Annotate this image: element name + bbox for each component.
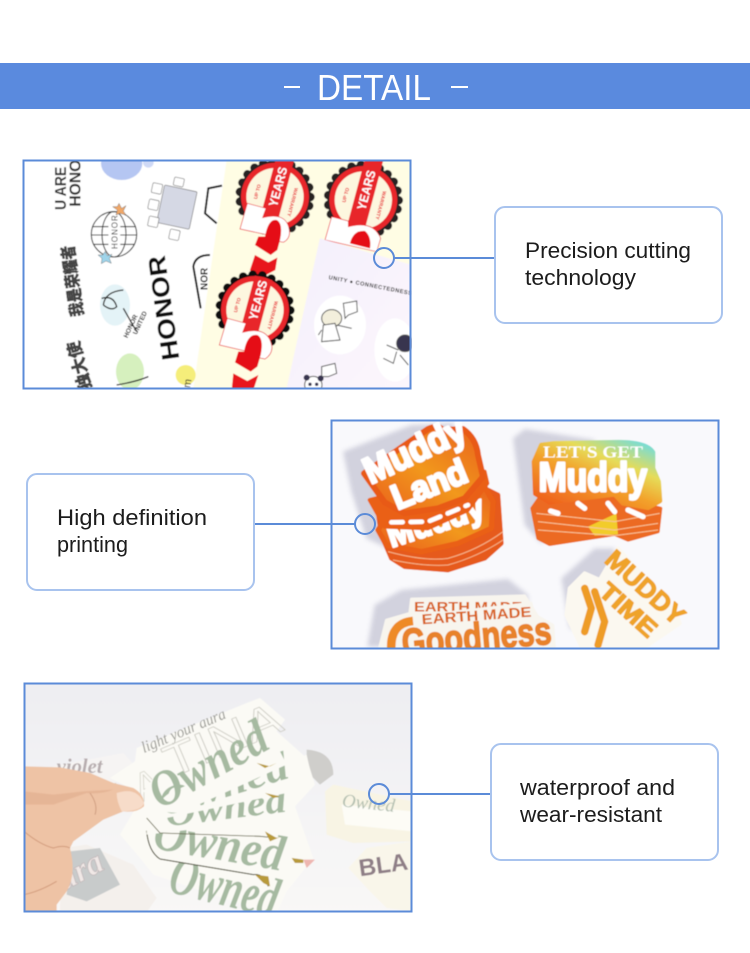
sticker: latina owned fan [115, 698, 315, 910]
sticker badge: YEARS [246, 279, 270, 322]
marker: panel 1 [374, 248, 394, 268]
callout connector: precision cutting [394, 257, 495, 259]
sticker badge: UP TO [253, 184, 263, 200]
callout: precision cutting [495, 207, 722, 323]
sticker badge: WARRANTY [265, 300, 279, 331]
sticker badge [323, 162, 404, 236]
blurred background stickers: ura [50, 843, 110, 898]
sticker: holographic muddy stack: Muddy [539, 454, 647, 500]
callout: high definition: High definition [57, 505, 207, 530]
sticker: muddy land stack: Land [386, 452, 473, 517]
sticker: muddy land stack: Muddy [356, 408, 472, 492]
panel: owned stickers photo [24, 683, 412, 931]
panel: sticker sheets photo: U ARE [53, 167, 70, 210]
five numeral [240, 203, 290, 277]
callout: waterproof: waterproof and [519, 775, 675, 800]
sticker: earth made goodness stack [378, 594, 556, 648]
sticker: muddy time stack: TIME [593, 578, 662, 644]
sticker badge: WARRANTY [373, 190, 387, 221]
panel: sticker sheets photo [54, 162, 412, 388]
panel: sticker sheets photo: HONOR [123, 314, 140, 339]
frame: panel 1 [24, 160, 410, 388]
sticker: latina owned fan: TINA [156, 692, 289, 787]
sticker: muddy land stack: Muddy [382, 488, 490, 555]
panel: sticker sheets photo: NOR [199, 268, 210, 290]
frame: panel 3 [24, 684, 412, 912]
sticker: earth made goodness stack: Goodness [400, 609, 553, 666]
blurred background stickers: BLA [357, 849, 410, 882]
marker: panel 2 [355, 514, 375, 534]
panel: sticker sheets photo: HONOR [68, 148, 85, 207]
sticker badge: UP TO [341, 187, 351, 203]
sticker: latina owned fan: LA [106, 760, 169, 820]
blurred background stickers: Owned [341, 790, 397, 817]
sticker: earth made goodness stack: EARTH MADE [421, 605, 532, 628]
panel: sticker sheets photo: 独大使 [63, 339, 96, 392]
hand holding stickers [24, 766, 144, 912]
sticker badge: YEARS [266, 165, 290, 208]
sticker: latina owned fan: Owned [138, 708, 278, 819]
sticker: holographic muddy stack [532, 442, 661, 544]
sticker: latina owned fan: Owned [164, 844, 286, 931]
panel: sticker sheets photo: m [181, 378, 195, 389]
banner title: DETAIL [317, 67, 431, 108]
sticker: latina owned fan: Owned [150, 804, 290, 882]
blurred background stickers [50, 750, 412, 912]
callout: precision cutting: technology [525, 265, 636, 290]
panel: sticker sheets photo: HONOR [144, 254, 185, 362]
sticker badge: UP TO [233, 297, 243, 313]
panel: sticker sheets photo: UNITED [132, 310, 149, 336]
callout: waterproof [491, 744, 718, 860]
sticker: muddy time stack: MUDDY [599, 544, 691, 631]
callout: high definition [27, 474, 254, 590]
sticker badge: WARRANTY [285, 187, 299, 217]
callout connector: high definition [254, 523, 355, 525]
sticker: latina owned fan: Owned [163, 779, 289, 834]
sticker: muddy land stack [356, 408, 503, 570]
marker: panel 3 [369, 784, 389, 804]
sticker: muddy time stack [566, 544, 691, 650]
five numeral [219, 318, 272, 390]
callout connector: waterproof [389, 793, 491, 795]
sticker: holographic muddy stack: LET'S GET [543, 443, 643, 462]
blurred background stickers: violet [57, 756, 104, 778]
sticker: latina owned fan: Owned [153, 743, 295, 825]
panel: muddy stickers photo [340, 422, 688, 648]
sticker badge: YEARS [355, 169, 379, 212]
sticker badge [235, 162, 316, 235]
callout: waterproof: wear-resistant [519, 802, 662, 827]
panel: sticker sheets photo: 我是荣耀者 [58, 244, 87, 318]
panel: sticker sheets photo: UNITY ● CONNECTEDNESS ● S [328, 275, 425, 300]
sticker badge [215, 270, 296, 346]
frame: panel 2 [332, 420, 718, 648]
callout: high definition: printing [57, 532, 128, 557]
panel: sticker sheets photo: HONOR [110, 214, 119, 249]
sticker: latina owned fan: light your aura [139, 706, 228, 757]
sticker: earth made goodness stack: EARTH MADE [414, 599, 522, 615]
callout: precision cutting: Precision cutting [525, 238, 691, 263]
header banner [0, 63, 750, 109]
